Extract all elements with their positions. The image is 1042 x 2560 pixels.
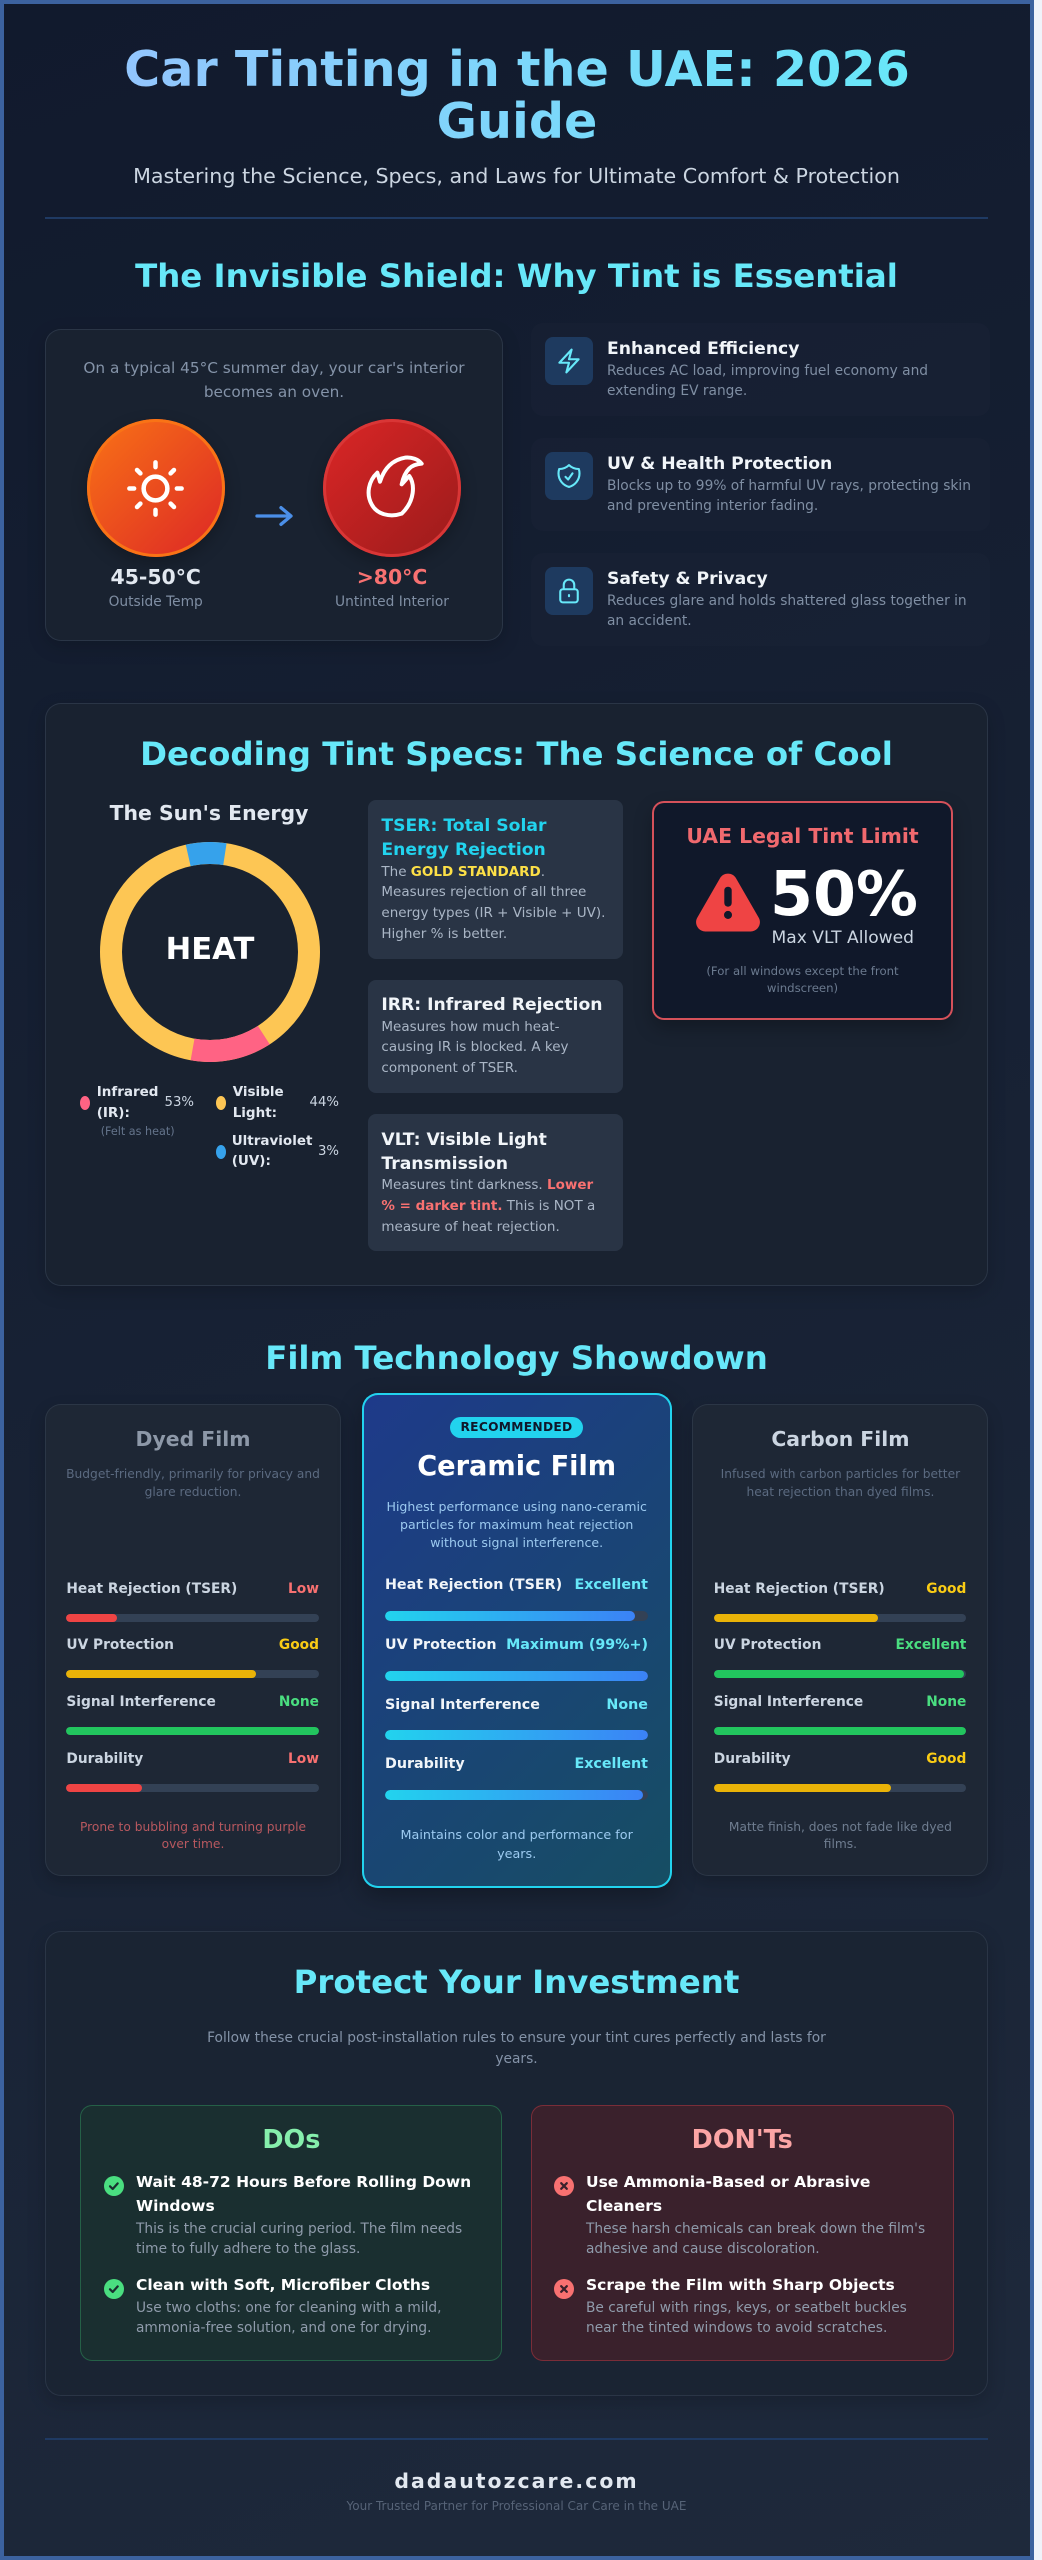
sun energy heading: The Sun's Energy: [110, 801, 308, 825]
panel: dos: Windows: [136, 2197, 215, 2215]
metric: durability: Durability: [714, 1751, 791, 1767]
intro text: On a typical 45°C summer day, your car's interior: [83, 359, 465, 377]
metric: uv: Excellent: [895, 1637, 966, 1653]
spec card: vlt: Transmission: [381, 1154, 508, 1174]
benefit: efficiency: Enhanced Efficiency: [607, 339, 799, 359]
panel: dos: Clean with Soft, Microfiber Cloths: [136, 2276, 430, 2294]
metric: uv: UV Protection: [66, 1637, 174, 1653]
metric: signal: [385, 1697, 648, 1740]
spec card: irr: Measures how much heat-: [381, 1019, 560, 1035]
panel: dyed film: Dyed Film: [136, 1427, 250, 1451]
spec card: tser: [368, 800, 623, 959]
metric: uv: Good: [279, 1637, 319, 1653]
legend: infrared: [80, 1096, 90, 1110]
metric: durability: [714, 1751, 966, 1792]
heading: Protect Your Investment: [294, 1963, 739, 2001]
panel: protect your investment: [45, 1931, 988, 2396]
footnote: (For all windows except the front: [706, 964, 899, 978]
benefit: efficiency: [531, 323, 990, 416]
benefit: uv: and preventing interior fading.: [607, 498, 818, 514]
metric: heat: Heat Rejection (TSER): [66, 1581, 237, 1597]
interior temperature: >80°C: [357, 565, 427, 589]
heading: invisible shield: The Invisible Shield: Why Tint is Essential: [135, 257, 898, 295]
footnote: [706, 964, 899, 995]
spec card: tser: Energy Rejection: [381, 840, 546, 860]
brand: dadautozcare.com: [394, 2469, 639, 2493]
legend: 3%: [318, 1144, 339, 1159]
panel: dyed film: Prone to bubbling and turning purple: [80, 1820, 306, 1834]
callout title: UAE Legal Tint Limit: [686, 824, 919, 848]
metric: uv: UV Protection: [714, 1637, 821, 1653]
interior temperature: [335, 565, 449, 610]
title: Guide: [437, 92, 597, 150]
panel: decoding tint specs: [45, 703, 988, 1286]
panel: donts: Scrape the Film with Sharp Objects: [586, 2276, 895, 2294]
panel: dyed film: over time.: [162, 1837, 224, 1851]
badge: RECOMMENDED: [460, 1420, 573, 1434]
metric: uv: UV Protection: [385, 1637, 496, 1653]
panel: donts: adhesive and cause discoloration.: [586, 2241, 820, 2257]
heading: Decoding Tint Specs: The Science of Cool: [140, 735, 893, 773]
panel: dos: Wait 48-72 Hours Before Rolling Down: [136, 2173, 471, 2191]
metric: signal: None: [606, 1697, 648, 1713]
metric: uv: Maximum (99%+): [506, 1637, 648, 1653]
metric: heat: Excellent: [574, 1577, 648, 1593]
panel: dos: time to fully adhere to the glass.: [136, 2241, 360, 2257]
panel: dos: [80, 2104, 502, 2361]
legend: (Felt as heat): [101, 1125, 175, 1138]
benefit: safety: [531, 553, 990, 646]
spec card: tser: energy types (IR + Visible + UV).: [381, 905, 605, 921]
metric: heat: Heat Rejection (TSER): [385, 1577, 562, 1593]
metric: durability: Durability: [385, 1756, 465, 1772]
spec card: vlt: VLT: Visible Light: [381, 1130, 547, 1150]
title: Car Tinting in the UAE: 2026: [124, 40, 910, 98]
spec card: tser: Higher % is better.: [381, 926, 507, 942]
metric: signal: [714, 1694, 966, 1735]
donut chart: [100, 842, 320, 1062]
spec card: vlt: measure of heat rejection.: [381, 1219, 560, 1235]
spec card: tser: Measures rejection of all three: [381, 884, 586, 900]
legend: 53%: [165, 1095, 194, 1110]
panel: donts: near the tinted windows to avoid scratches.: [586, 2320, 887, 2336]
panel: donts: Be careful with rings, keys, or seatbelt buckles: [586, 2300, 907, 2316]
panel: donts: These harsh chemicals can break down the film's: [586, 2221, 925, 2237]
panel: dos: This is the crucial curing period. The film needs: [136, 2221, 462, 2237]
legend: (IR):: [97, 1105, 130, 1121]
donut centre label: HEAT: [166, 932, 254, 967]
spec card: tser: TSER: Total Solar: [381, 816, 546, 836]
big number caption: Max VLT Allowed: [772, 928, 914, 948]
benefit: safety: Reduces glare and holds shattered glass together in: [607, 593, 967, 609]
interior temperature: Untinted Interior: [335, 594, 449, 610]
panel: ceramic film: without signal interference.: [430, 1535, 603, 1550]
icon: flame: [323, 419, 461, 557]
intro: Follow these crucial post-installation rules to ensure your tint cures perfectly and lasts for: [207, 2030, 826, 2046]
metric: heat: Good: [926, 1581, 966, 1597]
legend: ultraviolet: [216, 1145, 226, 1159]
legend: Light:: [233, 1105, 277, 1121]
panel: ceramic film: Ceramic Film: [417, 1450, 616, 1482]
outside temperature: 45-50°C: [110, 565, 201, 589]
panel: ceramic film: particles for maximum heat rejection: [400, 1517, 633, 1532]
legend: Visible: [233, 1084, 284, 1100]
panel: ceramic film: [362, 1392, 672, 1888]
icon: cross: [554, 2176, 574, 2196]
big number: 50%: [770, 858, 918, 930]
benefit: uv: [531, 438, 990, 531]
subtitle: Mastering the Science, Specs, and Laws for Ultimate Comfort & Protection: [133, 164, 900, 188]
panel: carbon film: heat rejection than dyed films.: [746, 1485, 934, 1499]
metric: durability: [66, 1751, 319, 1792]
metric: heat: Heat Rejection (TSER): [714, 1581, 885, 1597]
outside temperature: Outside Temp: [109, 594, 203, 610]
metric: signal: Signal Interference: [66, 1694, 216, 1710]
panel: donts: DON'Ts: [692, 2125, 793, 2155]
metric: signal: None: [926, 1694, 966, 1710]
metric: heat: Low: [288, 1581, 319, 1597]
metric: uv: [385, 1637, 648, 1681]
metric: heat: [385, 1577, 648, 1621]
callout: legal limit: [652, 801, 953, 1020]
intro: years.: [495, 2051, 538, 2067]
panel: dyed film: glare reduction.: [145, 1485, 241, 1499]
panel: donts: Use Ammonia-Based or Abrasive: [586, 2173, 870, 2191]
panel: temperature comparison: [45, 329, 503, 641]
metric: durability: Low: [288, 1751, 319, 1767]
icon: shield: [545, 452, 593, 500]
icon: check: [104, 2279, 124, 2299]
metric: uv: [714, 1637, 966, 1678]
badge: [450, 1417, 583, 1438]
header: [124, 40, 910, 188]
panel: ceramic film: Maintains color and performance for: [401, 1828, 633, 1843]
outside temperature: [109, 565, 203, 610]
spec card: irr: component of TSER.: [381, 1060, 518, 1076]
spec card: vlt: Measures tint darkness. Lower: [381, 1177, 593, 1193]
benefit: safety: an accident.: [607, 613, 692, 629]
icon: sun: [87, 419, 225, 557]
panel: carbon film: Carbon Film: [771, 1427, 909, 1451]
legend: 44%: [310, 1095, 339, 1110]
metric: uv: [66, 1637, 319, 1678]
panel: ceramic film: years.: [497, 1847, 536, 1862]
icon: bolt: [545, 337, 593, 385]
legend: Ultraviolet: [232, 1133, 312, 1149]
metric: signal: [66, 1694, 319, 1735]
metric: durability: Good: [926, 1751, 966, 1767]
spec card: irr: [368, 980, 623, 1093]
legend: visible: [216, 1096, 226, 1110]
panel: carbon film: Infused with carbon particles for better: [721, 1467, 960, 1481]
panel: dos: DOs: [262, 2125, 320, 2155]
tagline: Your Trusted Partner for Professional Car Care in the UAE: [347, 2499, 686, 2513]
arrow: [255, 506, 293, 526]
spec card: irr: IRR: Infrared Rejection: [381, 995, 602, 1015]
footer: [346, 2469, 686, 2513]
icon: check: [104, 2176, 124, 2196]
metric: signal: Signal Interference: [385, 1697, 540, 1713]
panel: carbon film: films.: [824, 1837, 857, 1851]
metric: durability: Durability: [66, 1751, 143, 1767]
benefit: uv: UV & Health Protection: [607, 454, 832, 474]
spec card: irr: causing IR is blocked. A key: [381, 1039, 569, 1055]
legend: [80, 1084, 339, 1169]
metric: signal: None: [279, 1694, 319, 1710]
title: [117, 43, 917, 147]
panel: dos: ammonia-free solution, and one for drying.: [136, 2320, 432, 2336]
benefit: uv: Blocks up to 99% of harmful UV rays, protecting skin: [607, 478, 971, 494]
panel: donts: Cleaners: [586, 2197, 662, 2215]
intro text: [83, 359, 465, 401]
metric: signal: Signal Interference: [714, 1694, 863, 1710]
metric: heat: [66, 1581, 319, 1622]
panel: donts: [531, 2104, 954, 2361]
panel: ceramic film: Highest performance using nano-ceramic: [387, 1499, 647, 1514]
benefit: efficiency: extending EV range.: [607, 383, 747, 399]
footnote: windscreen): [767, 981, 838, 995]
metric: durability: [385, 1756, 648, 1800]
metric: heat: [714, 1581, 966, 1622]
panel: dos: Use two cloths: one for cleaning with a mild,: [136, 2300, 442, 2316]
icon: warning triangle: [696, 874, 760, 932]
intro text: becomes an oven.: [204, 383, 344, 401]
panel: carbon film: Matte finish, does not fade like dyed: [729, 1820, 952, 1834]
heading: film technology: Film Technology Showdown: [265, 1339, 768, 1377]
benefit: safety: Safety & Privacy: [607, 569, 768, 589]
spec card: vlt: % = darker tint. This is NOT a: [381, 1198, 595, 1214]
spec card: vlt: [368, 1114, 623, 1251]
legend: (UV):: [232, 1153, 271, 1169]
spec card: tser: The GOLD STANDARD.: [381, 864, 545, 880]
panel: dyed film: Budget-friendly, primarily for privacy and: [66, 1467, 320, 1481]
legend: Infrared: [97, 1084, 158, 1100]
panel: carbon film: [692, 1404, 988, 1876]
panel: dyed film: [45, 1404, 341, 1876]
benefit: efficiency: Reduces AC load, improving fuel economy and: [607, 363, 928, 379]
intro: [207, 2030, 826, 2067]
metric: durability: Excellent: [574, 1756, 648, 1772]
icon: cross: [554, 2279, 574, 2299]
icon: lock: [545, 567, 593, 615]
